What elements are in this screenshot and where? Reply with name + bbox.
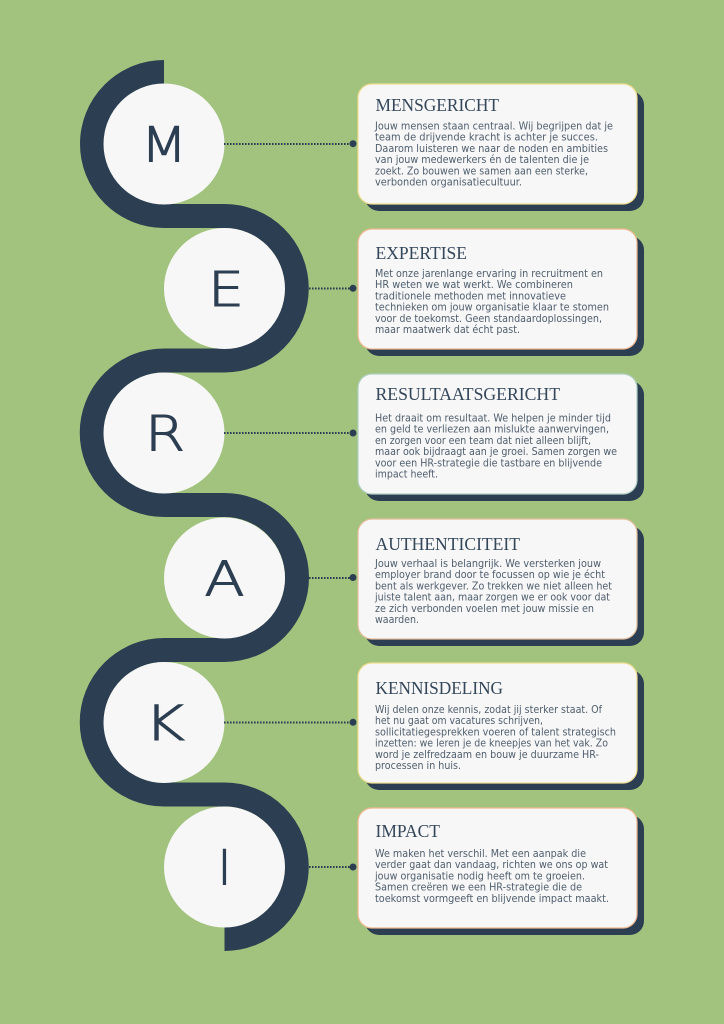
panel: Mensgericht: Jouw mensen staan centraal. Wij begrijpen dat je <box>374 120 613 132</box>
panel: Mensgericht: team de drijvende kracht is achter je succes. <box>375 132 598 144</box>
panel: Mensgericht: MENSGERICHT <box>376 95 499 115</box>
panel: Expertise: voor de toekomst. Geen standaardoplossingen, <box>375 313 602 325</box>
winding path <box>92 72 297 939</box>
panel: Kennisdeling: inzetten: we leren je de kneepjes van het vak. Zo <box>375 738 608 750</box>
panel: Impact: IMPACT <box>376 821 440 841</box>
panel: Authenticiteit: waarden. <box>375 614 419 626</box>
panel: Kennisdeling: het nu gaat om vacatures schrijven, <box>375 715 543 727</box>
panel: Kennisdeling: sollicitatiegesprekken voeren of talent strategisch <box>375 726 616 738</box>
panel: Resultaatsgericht: Het draait om resultaat. We helpen je minder tijd <box>375 412 611 424</box>
panel: Authenticiteit: ze zich verbonden voelen met jouw missie en <box>375 603 594 615</box>
panel: Authenticiteit: Jouw verhaal is belangrijk. We versterken jouw <box>374 558 601 570</box>
step E: circle: E <box>208 262 244 318</box>
panel: Authenticiteit <box>358 519 644 646</box>
step M: circle <box>104 84 224 204</box>
panel: Expertise: traditionele methoden met innovatieve <box>375 290 566 302</box>
panel: Authenticiteit: juiste talent aan, maar zorgen we er ook voor dat <box>374 592 610 604</box>
connector A <box>309 574 356 581</box>
panel: Expertise: Met onze jarenlange ervaring in recruitment en <box>375 268 603 280</box>
panel: Expertise: maar maatwerk dat écht past. <box>375 324 520 336</box>
panel: Kennisdeling: processen in huis. <box>375 760 461 772</box>
connector K <box>224 719 356 726</box>
panel: Kennisdeling <box>358 663 644 790</box>
panel: Resultaatsgericht <box>358 374 644 501</box>
step R: circle <box>104 372 224 494</box>
panel: Impact: verder gaat dan vandaag, richten we ons op wat <box>375 859 608 871</box>
panel: Impact: We maken het verschil. Met een aanpak die <box>375 848 586 860</box>
connector E <box>309 285 356 292</box>
step R: circle: R <box>145 406 185 462</box>
panel: Impact: Samen creëren we een HR-strategie die de <box>375 882 582 894</box>
panel: Impact: jouw organisatie nodig heeft om te groeien. <box>374 870 585 882</box>
step A: circle <box>164 518 285 638</box>
panel: Kennisdeling: Wij delen onze kennis, zodat jij sterker staat. Of <box>375 704 602 716</box>
panel: Impact <box>358 808 644 935</box>
panel: Impact: toekomst vormgeeft en blijvende impact maakt. <box>375 893 609 905</box>
panel: Expertise <box>358 229 644 356</box>
panel: Mensgericht: van jouw medewerkers én de talenten die je <box>375 154 589 166</box>
panel: Expertise: technieken om jouw organisatie klaar te stomen <box>375 302 609 314</box>
panel: Kennisdeling: KENNISDELING <box>376 678 503 698</box>
panel: Authenticiteit: bent als werkgever. Zo trekken we niet alleen het <box>375 580 612 592</box>
panel: Resultaatsgericht: RESULTAATSGERICHT <box>376 384 560 404</box>
panel: Resultaatsgericht: maar ook bijdraagt aan je groei. Samen zorgen we <box>375 446 617 458</box>
panel: Resultaatsgericht: voor een HR-strategie die tastbare en blijvende <box>375 457 602 469</box>
step M: circle: M <box>141 118 187 174</box>
panel: Expertise: EXPERTISE <box>376 243 467 263</box>
step A: circle: A <box>204 552 244 608</box>
panel: Mensgericht: Daarom luisteren we naar de noden en ambities <box>375 143 608 155</box>
panel: Resultaatsgericht: impact heeft. <box>375 468 438 480</box>
panel: Expertise: HR weten we wat werkt. We combineren <box>375 279 573 291</box>
step I: circle: I <box>218 840 231 896</box>
panel: Authenticiteit: employer brand door te focussen op wie je écht <box>375 569 605 581</box>
connector M <box>224 140 356 147</box>
connector I <box>309 864 356 870</box>
panel: Mensgericht <box>358 84 644 211</box>
step K: circle: K <box>144 696 184 752</box>
connector R <box>224 430 356 436</box>
panel: Kennisdeling: word je zelfredzaam en bouw je duurzame HR- <box>375 749 599 761</box>
panel: Authenticiteit: AUTHENTICITEIT <box>376 534 520 554</box>
step I: circle <box>164 806 285 928</box>
panel: Mensgericht: verbonden organisatiecultuur. <box>375 176 522 188</box>
panel: Resultaatsgericht: en zorgen voor een team dat niet alleen blijft, <box>375 435 591 447</box>
step K: circle <box>104 662 224 783</box>
panel: Resultaatsgericht: en geld te verliezen aan mislukte aanwervingen, <box>375 424 609 436</box>
panel: Mensgericht: zoekt. Zo bouwen we samen aan een sterke, <box>375 165 588 177</box>
step E: circle <box>164 228 285 349</box>
